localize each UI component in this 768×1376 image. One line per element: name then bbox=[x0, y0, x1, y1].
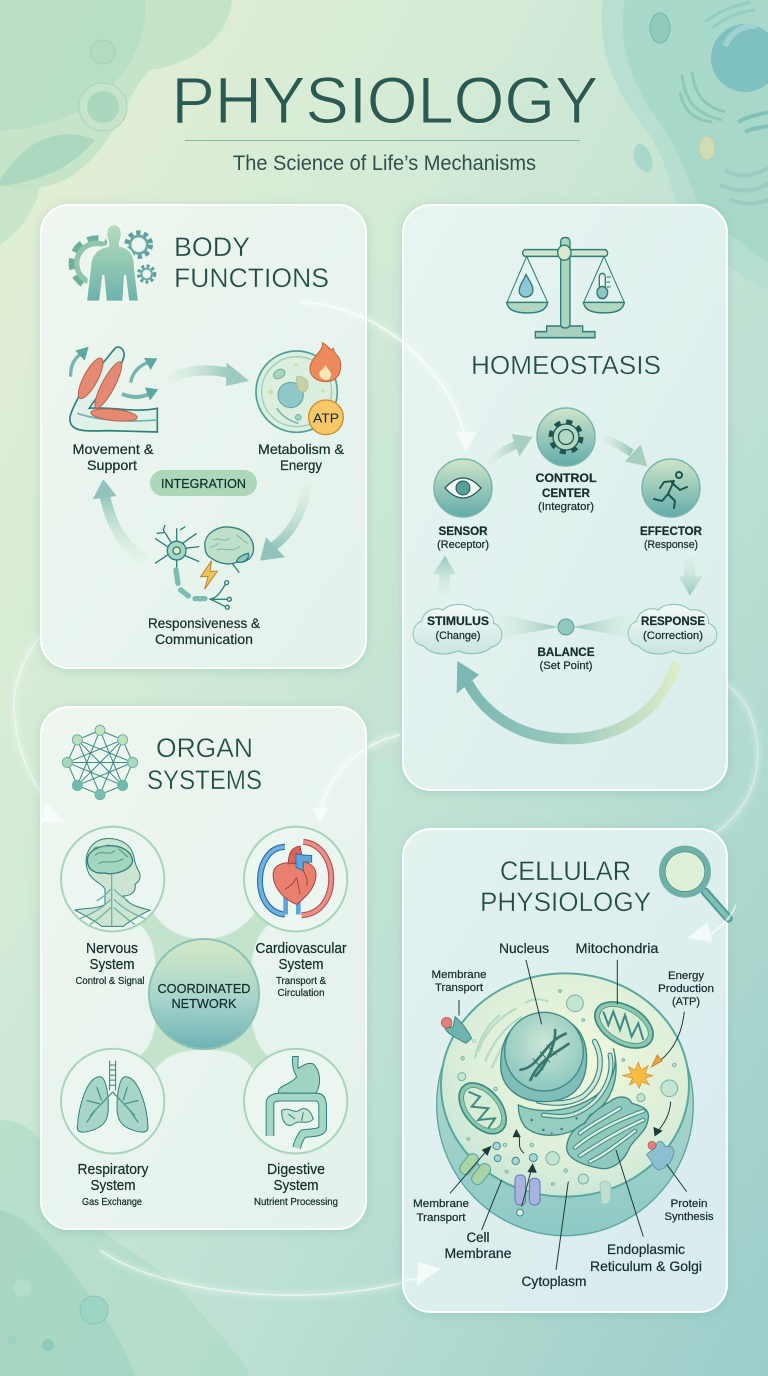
heading bbox=[480, 856, 651, 917]
label: nervous system bbox=[76, 940, 144, 987]
label: nervous system: Control & Signal bbox=[76, 976, 144, 987]
arrowheads: flow bbox=[42, 432, 712, 1286]
heading: CELLULAR bbox=[500, 856, 631, 886]
arrow: responsiveness to movement bbox=[93, 479, 147, 560]
label: respiratory system: Respiratory bbox=[78, 1161, 149, 1178]
icon: digestive system bbox=[244, 1049, 347, 1154]
cloud: stimulus bbox=[413, 604, 502, 654]
network connector hub bbox=[135, 908, 273, 1073]
label: nervous system: System bbox=[90, 956, 134, 973]
arrow: metabolism to responsiveness bbox=[260, 483, 307, 561]
callout leader lines bbox=[450, 960, 687, 1270]
balance connector bbox=[500, 614, 632, 638]
panel card bbox=[41, 707, 366, 1229]
panel card bbox=[403, 205, 727, 790]
icon: network bbox=[62, 725, 138, 800]
label: responsiveness: Responsiveness & bbox=[148, 615, 261, 631]
label: digestive system: System bbox=[274, 1177, 318, 1194]
golgi apparatus bbox=[567, 1097, 648, 1169]
faded protein marker bbox=[600, 1181, 611, 1204]
node: sensor: (Receptor) bbox=[437, 539, 489, 551]
label: endoplasmic reticulum and golgi: Endoplasmic bbox=[607, 1241, 685, 1257]
heading bbox=[147, 733, 262, 795]
label: cardiovascular system: Circulation bbox=[278, 988, 324, 999]
label: digestive system: Digestive bbox=[267, 1161, 325, 1178]
cytoplasm bbox=[441, 973, 689, 1197]
diagram: cell bbox=[437, 960, 693, 1270]
heading: HOMEOSTASIS bbox=[471, 350, 661, 380]
panel: homeostasis bbox=[403, 205, 727, 790]
node: coordinated network: COORDINATED bbox=[158, 981, 250, 996]
node: control center: CONTROL bbox=[536, 471, 596, 485]
arrow: response back to stimulus bbox=[457, 661, 677, 739]
label: membrane transport bottom bbox=[413, 1198, 469, 1224]
integration pill: INTEGRATION bbox=[161, 476, 246, 491]
label: metabolism: Metabolism & bbox=[258, 441, 345, 457]
mitochondrion lower bbox=[450, 1074, 516, 1143]
flow swirls over panels bbox=[300, 302, 736, 1280]
node: coordinated network bbox=[149, 939, 259, 1049]
node: sensor: SENSOR bbox=[438, 524, 488, 538]
label: cardiovascular system: Cardiovascular bbox=[256, 940, 346, 957]
icon: cell metabolism with flame: ATP bbox=[313, 410, 339, 425]
label: metabolism bbox=[258, 441, 345, 473]
node: control center: CENTER bbox=[542, 486, 590, 500]
node: sensor bbox=[434, 459, 492, 551]
divider bbox=[185, 140, 580, 142]
label: movement bbox=[72, 441, 154, 473]
icon: respiratory system bbox=[61, 1049, 164, 1154]
label: endoplasmic reticulum and golgi: Reticulum & Golgi bbox=[590, 1258, 702, 1274]
label: nucleus: Nucleus bbox=[499, 940, 549, 956]
label: nervous system: Nervous bbox=[86, 940, 138, 957]
label: respiratory system: Gas Exchange bbox=[82, 1197, 142, 1208]
node: control center: (Integrator) bbox=[538, 501, 594, 513]
label: respiratory system: System bbox=[90, 1177, 136, 1194]
node: effector bbox=[640, 459, 702, 551]
node: effector: EFFECTOR bbox=[640, 524, 702, 538]
label: cardiovascular system bbox=[256, 940, 346, 999]
label: cell membrane: Membrane bbox=[444, 1245, 512, 1261]
label: digestive system: Nutrient Processing bbox=[254, 1197, 338, 1208]
label: membrane transport top: Transport bbox=[435, 982, 483, 994]
panel card bbox=[403, 829, 727, 1312]
cloud: response: (Correction) bbox=[643, 630, 703, 642]
arrow: control to effector bbox=[602, 438, 647, 466]
panel: organ systems bbox=[41, 707, 366, 1229]
label: energy production: Energy bbox=[668, 970, 705, 982]
node: control center bbox=[536, 408, 596, 513]
cell body bbox=[437, 974, 693, 1236]
protein receptor right bbox=[647, 1141, 674, 1170]
cloud: response: RESPONSE bbox=[641, 614, 705, 628]
label: protein synthesis bbox=[664, 1198, 714, 1223]
membrane channel purple bbox=[515, 1175, 540, 1205]
heading: SYSTEMS bbox=[147, 765, 262, 795]
label: balance: BALANCE bbox=[538, 645, 594, 659]
decoration: bottom-left organic blobs bbox=[0, 1120, 250, 1376]
icon: nervous system bbox=[61, 827, 164, 931]
icon: cardiovascular system bbox=[244, 827, 347, 931]
label: energy production: (ATP) bbox=[672, 996, 700, 1008]
label: membrane transport bottom: Transport bbox=[416, 1212, 466, 1224]
icon: neuron and brain bbox=[155, 525, 254, 609]
label: endoplasmic reticulum and golgi bbox=[590, 1241, 702, 1274]
faded golgi bbox=[475, 999, 548, 1068]
heading: ORGAN bbox=[156, 733, 253, 763]
heading: BODY bbox=[174, 232, 250, 262]
endoplasmic reticulum bands bbox=[538, 1042, 611, 1116]
label: responsiveness bbox=[148, 615, 261, 647]
label: cardiovascular system: System bbox=[278, 956, 324, 973]
arrow: movement to metabolism bbox=[167, 363, 249, 386]
label: metabolism: Energy bbox=[280, 457, 322, 473]
label: membrane transport top: Membrane bbox=[432, 969, 486, 981]
flow swirl: behind panels bbox=[14, 555, 758, 1295]
cloud: response bbox=[628, 604, 717, 654]
label: movement: Movement & bbox=[72, 441, 154, 457]
label: energy production bbox=[658, 970, 714, 1008]
label: cell membrane bbox=[444, 1229, 512, 1261]
icon: magnifying glass bbox=[662, 848, 728, 918]
endoplasmic reticulum block bbox=[518, 1048, 616, 1135]
icon: muscle and arm bbox=[70, 347, 158, 432]
label: protein synthesis: Synthesis bbox=[664, 1211, 714, 1223]
node: effector: (Response) bbox=[644, 539, 698, 551]
icon: cell metabolism with flame bbox=[256, 343, 343, 435]
arrow: sensor to control bbox=[487, 434, 532, 463]
vesicles bbox=[458, 990, 678, 1216]
title block bbox=[172, 63, 598, 175]
cloud: stimulus: STIMULUS bbox=[427, 614, 489, 628]
arrow: effector to response bbox=[679, 557, 703, 596]
decoration: top-right background cell bbox=[602, 0, 768, 290]
icon: balance scale bbox=[507, 238, 624, 338]
label: responsiveness: Communication bbox=[155, 631, 253, 647]
icon: body with gears bbox=[73, 224, 155, 302]
heading: PHYSIOLOGY bbox=[480, 887, 651, 917]
decoration: top-left organic blobs bbox=[0, 0, 232, 245]
label: respiratory system bbox=[78, 1161, 149, 1208]
label: movement: Support bbox=[87, 457, 137, 473]
title: PHYSIOLOGY bbox=[172, 63, 598, 137]
cloud: stimulus: (Change) bbox=[436, 630, 480, 642]
heading bbox=[174, 232, 329, 293]
label: energy production: Production bbox=[658, 983, 714, 995]
panel card bbox=[41, 205, 366, 668]
label: balance: (Set Point) bbox=[540, 660, 592, 672]
arrow: stimulus to sensor bbox=[433, 556, 456, 595]
nucleus bbox=[501, 1012, 587, 1102]
label: digestive system bbox=[254, 1161, 338, 1208]
subtitle: The Science of Life’s Mechanisms bbox=[233, 152, 536, 175]
node: coordinated network: NETWORK bbox=[172, 996, 237, 1011]
heading: FUNCTIONS bbox=[174, 263, 329, 293]
mitochondrion upper bbox=[587, 992, 661, 1058]
panel: body functions bbox=[41, 205, 366, 668]
label: mitochondria: Mitochondria bbox=[576, 940, 659, 956]
label: protein synthesis: Protein bbox=[670, 1198, 708, 1210]
label: balance bbox=[538, 645, 594, 672]
label: membrane transport bottom: Membrane bbox=[413, 1198, 469, 1210]
label: cell membrane: Cell bbox=[466, 1229, 490, 1245]
label: cytoplasm: Cytoplasm bbox=[522, 1273, 586, 1289]
membrane channel left bbox=[457, 1151, 493, 1187]
energy burst bbox=[623, 1062, 653, 1088]
panel: cellular physiology bbox=[403, 829, 728, 1312]
label: cardiovascular system: Transport & bbox=[276, 976, 326, 987]
label: membrane transport top bbox=[432, 969, 486, 994]
membrane receptor top-left bbox=[441, 1017, 476, 1043]
integration pill bbox=[150, 470, 257, 496]
